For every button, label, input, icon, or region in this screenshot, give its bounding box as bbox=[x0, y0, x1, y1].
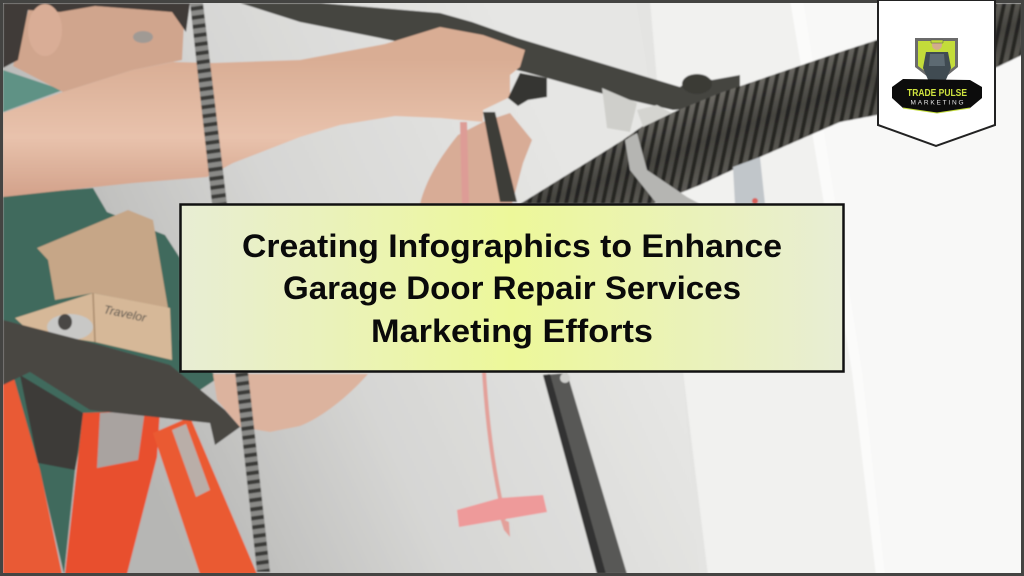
photo: step ladder bbox=[3, 320, 257, 574]
title bbox=[242, 228, 782, 349]
photo: torsion spring bbox=[520, 3, 1022, 204]
photo: cardboard box bbox=[15, 210, 172, 360]
title: Creating Infographics to Enhance bbox=[242, 228, 782, 264]
logo wordmark bbox=[892, 79, 982, 113]
logo badge bbox=[878, 0, 995, 146]
photo: shirt of technician bbox=[3, 70, 218, 574]
photo: rail bracket and bar bbox=[483, 73, 712, 202]
photo: technician head bbox=[3, 3, 190, 92]
title: Marketing Efforts bbox=[371, 313, 653, 349]
logo shield icon bbox=[915, 38, 958, 84]
logo wordmark: TRADE PULSE bbox=[907, 88, 967, 99]
photo: cardboard box: Travelor bbox=[102, 302, 148, 325]
title panel bbox=[180, 204, 844, 372]
photo: pull cord and handle bbox=[457, 122, 547, 537]
photo: lower strut bbox=[543, 373, 627, 574]
photo: technician arm and hand bbox=[3, 27, 532, 432]
title: Garage Door Repair Services bbox=[283, 270, 741, 306]
logo wordmark: MARKETING bbox=[910, 100, 964, 106]
photo: drive belt bbox=[190, 3, 270, 572]
photo: overhead rail bbox=[240, 3, 740, 110]
